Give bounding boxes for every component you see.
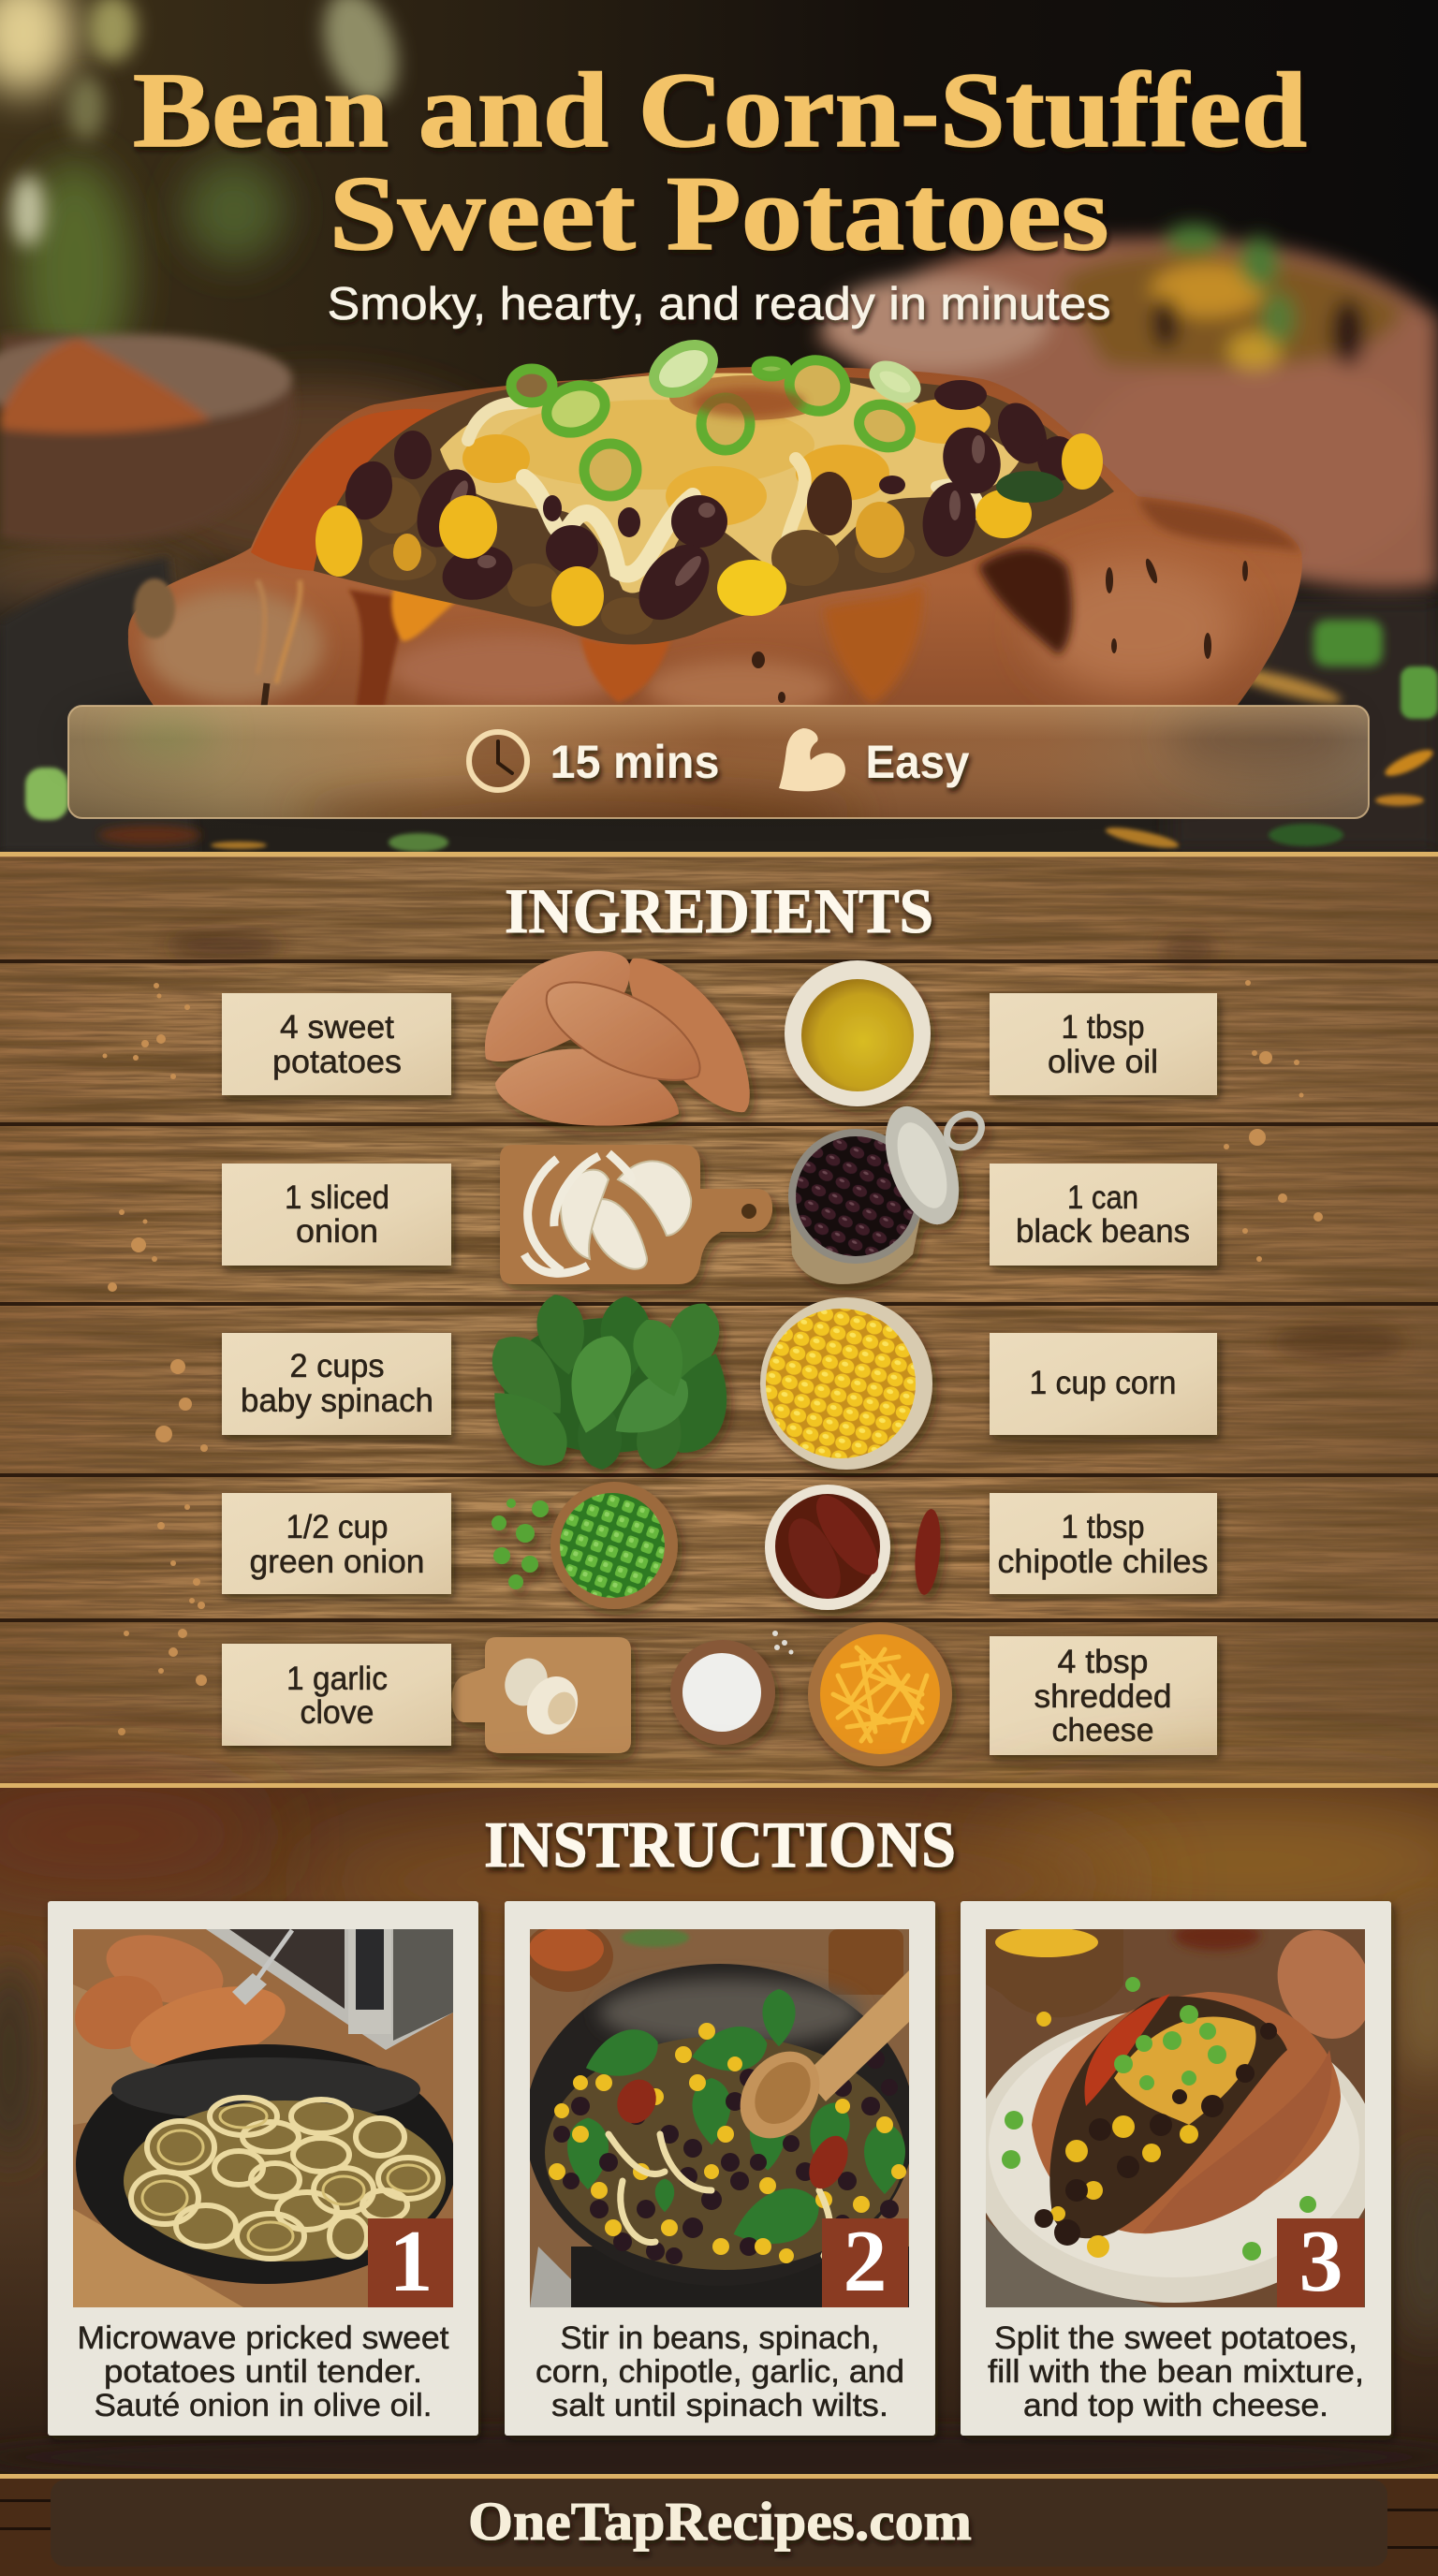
- step 1 text: potatoes until tender.: [104, 2354, 422, 2390]
- icon: flexed arm: [779, 728, 845, 791]
- step 2 text: Stir in beans, spinach,: [560, 2320, 880, 2356]
- ingredient label: 1 can black beans: black beans: [1016, 1213, 1190, 1250]
- illustration: garlic on board: [451, 1637, 631, 1753]
- subtitle: Smoky, hearty, and ready in minutes: [328, 279, 1110, 329]
- step 1 text: Sauté onion in olive oil.: [94, 2388, 433, 2423]
- ingredient label: 2 cups baby spinach: baby spinach: [241, 1383, 433, 1419]
- number badge 2: 2: [843, 2213, 888, 2310]
- step card 2: [505, 1901, 935, 2436]
- ingredient label: 4 sweet potatoes: [222, 993, 451, 1095]
- orange flesh opening: [251, 409, 459, 571]
- ingredient label: 1/2 cup green onion: 1/2 cup: [286, 1509, 388, 1545]
- illustration: corn bowl: [760, 1297, 932, 1470]
- ingredient label: 1 sliced onion: [222, 1164, 451, 1266]
- wood planks: [0, 857, 1438, 1786]
- main stuffed sweet potato: [127, 340, 1329, 706]
- blurred scattered garnish: [25, 620, 1438, 852]
- footer bar: [51, 2480, 1387, 2567]
- ingredient label: 1 cup corn: 1 cup corn: [1030, 1365, 1176, 1401]
- ingredient label: 1 tbsp chipotle chiles: [990, 1493, 1217, 1594]
- ingredient label: 2 cups baby spinach: 2 cups: [290, 1348, 384, 1384]
- number badge 2: [822, 2213, 908, 2310]
- number badge 1: 1: [389, 2213, 433, 2310]
- number badge 3: 3: [1299, 2213, 1343, 2310]
- heading: instructions: INSTRUCTIONS: [484, 1809, 956, 1881]
- illustration: green onion bowl: [492, 1482, 678, 1609]
- ingredient label: 1/2 cup green onion: green onion: [249, 1544, 425, 1580]
- blurred spice bowl: [0, 333, 294, 545]
- hero panel: [0, 0, 1438, 861]
- step 3 text: and top with cheese.: [1023, 2388, 1328, 2423]
- difficulty label: Easy: [865, 736, 970, 788]
- step 1 text: Microwave pricked sweet: [77, 2320, 449, 2356]
- illustration: sliced onion on board: [500, 1145, 772, 1284]
- ingredient label: 1/2 cup green onion: [222, 1493, 451, 1594]
- step 1 text: [77, 2320, 449, 2423]
- background table and pan: [0, 384, 1438, 861]
- ingredient label: 1 tbsp olive oil: olive oil: [1048, 1044, 1158, 1080]
- step 3 text: fill with the bean mixture,: [988, 2354, 1364, 2390]
- step 2 text: [536, 2320, 904, 2423]
- corn kernels: [315, 433, 1103, 626]
- step card 1: [48, 1901, 478, 2436]
- time label: 15 mins: [550, 736, 719, 788]
- ingredient label: 2 cups baby spinach: [222, 1333, 451, 1435]
- title: Bean and Corn-Stuffed: [133, 51, 1307, 169]
- title: [133, 51, 1307, 272]
- ingredient label: 1 tbsp chipotle chiles: 1 tbsp: [1062, 1509, 1144, 1545]
- number badge 3: [1277, 2213, 1364, 2310]
- spinach in filling: [996, 471, 1064, 503]
- ingredient label: 1 tbsp chipotle chiles: chipotle chiles: [998, 1544, 1208, 1580]
- black beans: [338, 380, 1078, 634]
- chipotle dust: [693, 388, 805, 417]
- ingredient label: 1 sliced onion: 1 sliced: [285, 1179, 389, 1216]
- scattered spice crumbs: [103, 980, 1323, 1735]
- blurred backdrop: [0, 1788, 1438, 2485]
- ingredient label: 4 tbsp shredded cheese: cheese: [1052, 1712, 1153, 1749]
- illustration: can of black beans: [788, 1096, 989, 1284]
- bean highlights: [446, 435, 985, 590]
- melted cheese: [440, 373, 1020, 593]
- ingredient label: 1 garlic clove: [222, 1644, 451, 1746]
- number badge 1: [368, 2213, 453, 2310]
- ingredient label: 1 garlic clove: 1 garlic: [286, 1661, 388, 1697]
- step 2 photo: skillet with beans, spinach, corn: [523, 1921, 915, 2307]
- ingredient label: 4 tbsp shredded cheese: 4 tbsp: [1058, 1644, 1148, 1680]
- step 2 text: salt until spinach wilts.: [551, 2388, 888, 2423]
- heading: ingredients: INGREDIENTS: [505, 875, 933, 946]
- step 3 text: [988, 2320, 1364, 2423]
- ingredient label: 4 tbsp shredded cheese: shredded: [1034, 1678, 1172, 1715]
- step 2 text: corn, chipotle, garlic, and: [536, 2354, 904, 2390]
- step 1 photo: microwave, potatoes, onions in pan: [65, 1924, 456, 2307]
- panel: instructions: [0, 1786, 1438, 2485]
- blurred second stuffed potato: [814, 224, 1438, 590]
- panel: ingredients: [0, 852, 1438, 1788]
- illustration: baby spinach: [476, 1291, 744, 1480]
- ingredient label: 1 cup corn: [990, 1333, 1217, 1435]
- illustration: shredded cheese bowl: [808, 1622, 952, 1766]
- filling base: [314, 373, 1114, 644]
- ingredient label: 1 tbsp olive oil: 1 tbsp: [1062, 1009, 1144, 1046]
- ingredient label: 4 sweet potatoes: 4 sweet: [280, 1009, 394, 1046]
- ingredient label: 4 sweet potatoes: potatoes: [272, 1044, 402, 1080]
- title: Sweet Potatoes: [330, 154, 1108, 272]
- step card 3: [961, 1901, 1391, 2436]
- background foliage and light bokeh: [0, 0, 410, 339]
- skin highlights and char: [134, 498, 1301, 716]
- ingredient label: 1 can black beans: [990, 1164, 1217, 1266]
- ingredient label: 1 can black beans: 1 can: [1067, 1179, 1138, 1216]
- gold divider lines: [0, 852, 1438, 2479]
- ingredient label: 1 tbsp olive oil: [990, 993, 1217, 1095]
- step 3 text: Split the sweet potatoes,: [994, 2320, 1357, 2356]
- chunks of seasoned filling: [365, 477, 915, 635]
- website: OneTapRecipes.com: [468, 2491, 972, 2552]
- ingredient label: 4 tbsp shredded cheese: [990, 1636, 1217, 1755]
- step 3 photo: stuffed potato on plate: [970, 1914, 1389, 2307]
- illustration: olive oil bowl: [785, 960, 931, 1106]
- ingredient label: 1 garlic clove: clove: [300, 1694, 374, 1731]
- icon: clock: [469, 732, 527, 790]
- green onion rings: [511, 335, 921, 496]
- illustration: chipotle chiles: [765, 1485, 944, 1610]
- ingredient label: 1 sliced onion: onion: [296, 1213, 378, 1250]
- info bar: time and difficulty: [68, 702, 1369, 842]
- illustration: sweet potatoes: [485, 951, 750, 1126]
- illustration: salt bowl: [670, 1631, 794, 1745]
- footer: [0, 2477, 1438, 2576]
